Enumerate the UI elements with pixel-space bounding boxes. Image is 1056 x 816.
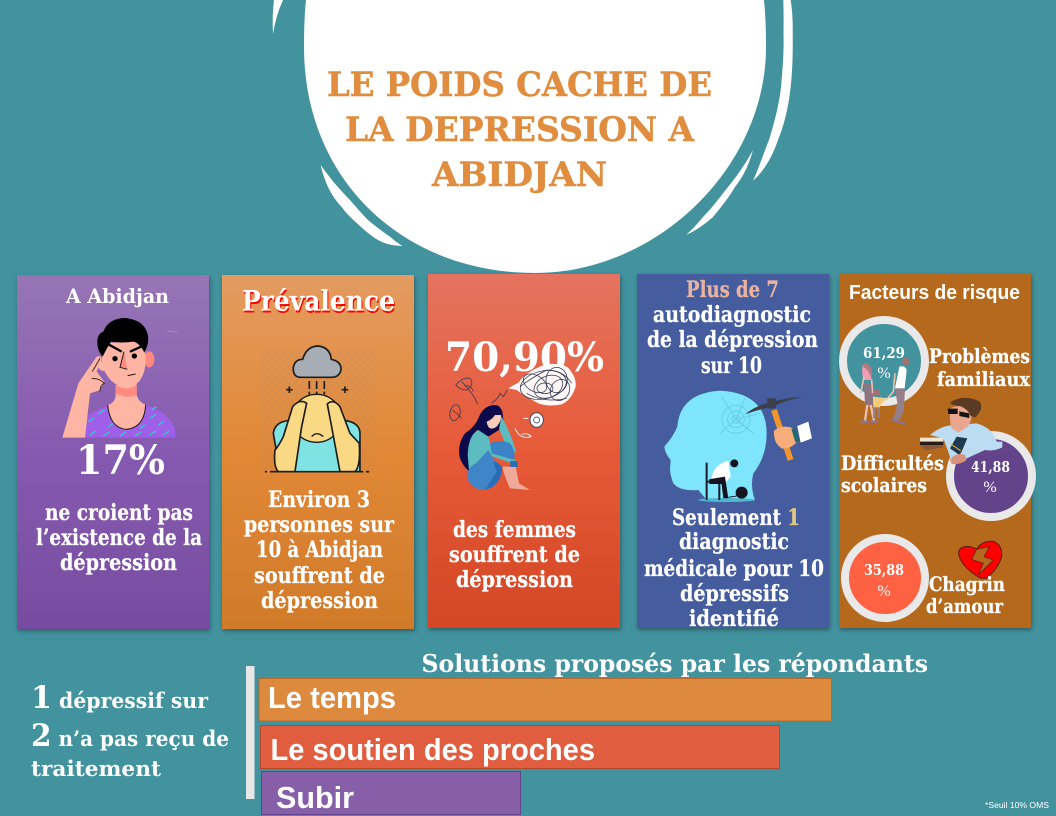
- bar: subir: [262, 772, 520, 815]
- heading: facteurs de risque: Facteurs de risque: [849, 282, 1020, 304]
- panel: autodiagnostic: [637, 274, 829, 632]
- text: chagrin d'amour: d’amour: [926, 595, 1004, 618]
- text: seulement 1 diagnostic: médicale pour 10: [644, 556, 824, 582]
- text: plus de 7 autodiagnostic: Plus de 7: [686, 277, 779, 303]
- ring: 35,88%: 35,88: [864, 562, 904, 579]
- footnote: *Seuil 10% OMS: [985, 801, 1049, 810]
- bar: le soutien des proches: [260, 726, 780, 768]
- callout: 1 dépressif sur 2: [31, 680, 229, 781]
- heading: A Abidjan: A Abidjan: [65, 284, 169, 308]
- text: des femmes souffrent de dépression: dépression: [456, 567, 573, 593]
- text: environ 3 personnes sur 10: Environ 3: [268, 487, 370, 513]
- title: ABIDJAN: [431, 155, 607, 195]
- text: plus de 7 autodiagnostic: [647, 277, 818, 379]
- text: ne croient pas: [36, 500, 202, 576]
- heading: Prévalence: Prévalence: [242, 284, 395, 318]
- text: chagrin d'amour: Chagrin: [929, 573, 1005, 596]
- heading: Prévalence: Prévalence: [243, 286, 396, 320]
- text: seulement 1 diagnostic: identifié: [689, 606, 779, 632]
- text: des femmes souffrent de dépression: souffrent de: [449, 542, 580, 568]
- bar: subir: Subir: [276, 780, 354, 815]
- text: difficultés scolaires: [841, 452, 944, 497]
- ring: 61,29%: %: [877, 365, 891, 382]
- ring: 35,88%: %: [877, 583, 891, 600]
- ring: 61,29%: [843, 320, 925, 402]
- text: problèmes familiaux: Problèmes: [929, 345, 1030, 368]
- text: des femmes souffrent de dépression: des femmes: [453, 517, 576, 543]
- text: plus de 7 autodiagnostic: de la dépression: [647, 327, 818, 353]
- panel: femmes 70,90%: [428, 274, 620, 628]
- title: [327, 65, 712, 195]
- bar: le soutien des proches: Le soutien des proches: [270, 732, 595, 767]
- text: environ 3 personnes sur 10: [244, 487, 395, 614]
- icon: head in hands under rain cloud: [260, 346, 375, 472]
- text: seulement 1 diagnostic: Seulement 1: [672, 505, 800, 531]
- text: seulement 1 diagnostic: [644, 505, 824, 632]
- bar: le temps: Le temps: [268, 680, 396, 715]
- panel: prévalence: [222, 275, 414, 629]
- text: problèmes familiaux: familiaux: [937, 368, 1030, 391]
- text: difficultés scolaires: scolaires: [841, 474, 927, 497]
- title blob: [273, 0, 793, 273]
- heading: solutions: Solutions proposés par les répondants: [422, 649, 928, 678]
- text: environ 3 personnes sur 10: personnes sur: [244, 512, 395, 538]
- stat: 17%: 17%: [76, 437, 165, 484]
- text: ne croient pas: ne croient pas: [45, 500, 193, 526]
- icon: pensive man: [62, 318, 176, 438]
- ring: 41,88%: 41,88: [971, 459, 1010, 476]
- callout: 1 dépressif sur 2: 1 dépressif sur: [31, 680, 209, 716]
- text: environ 3 personnes sur 10: souffrent de: [254, 563, 385, 589]
- text: seulement 1 diagnostic: diagnostic: [679, 529, 789, 555]
- icon: woman with tangled thoughts: [448, 364, 576, 490]
- text: des femmes souffrent de dépression: [449, 517, 580, 593]
- icon: broken heart: [959, 541, 1002, 578]
- text: ne croient pas: dépression: [60, 550, 177, 576]
- ring: 41,88%: [950, 435, 1032, 517]
- text: environ 3 personnes sur 10: 10 à Abidjan: [256, 537, 383, 563]
- callout: 1 dépressif sur 2: traitement: [31, 756, 161, 781]
- text: seulement 1 diagnostic: dépressifs: [680, 581, 789, 607]
- callout: 1 dépressif sur 2: 2 n’a pas reçu de: [31, 718, 229, 754]
- icon: head struck by pickaxe: [664, 391, 812, 502]
- text: plus de 7 autodiagnostic: sur 10: [701, 353, 762, 379]
- title: LE POIDS CACHE DE: [327, 65, 712, 105]
- icon: student with books: [920, 398, 1002, 464]
- text: environ 3 personnes sur 10: dépression: [261, 588, 378, 614]
- stat: 70,90%: 70,90%: [445, 334, 604, 381]
- panel: facteurs de risque: [839, 274, 1032, 628]
- text: problèmes familiaux: [929, 345, 1030, 391]
- icon: family: [861, 358, 910, 424]
- title: LA DEPRESSION A: [345, 110, 695, 150]
- panel: croyance 17%: [17, 275, 209, 629]
- text: chagrin d'amour: [926, 573, 1005, 618]
- bar: le temps: [259, 678, 832, 721]
- ring: 61,29%: 61,29: [863, 345, 905, 362]
- text: plus de 7 autodiagnostic: autodiagnostic: [653, 302, 811, 328]
- text: ne croient pas: l’existence de la: [36, 525, 202, 551]
- bar chart: solutions: [259, 678, 832, 815]
- ring: 35,88%: [845, 538, 925, 618]
- text: difficultés scolaires: Difficultés: [841, 452, 944, 475]
- ring: 41,88%: %: [983, 479, 997, 496]
